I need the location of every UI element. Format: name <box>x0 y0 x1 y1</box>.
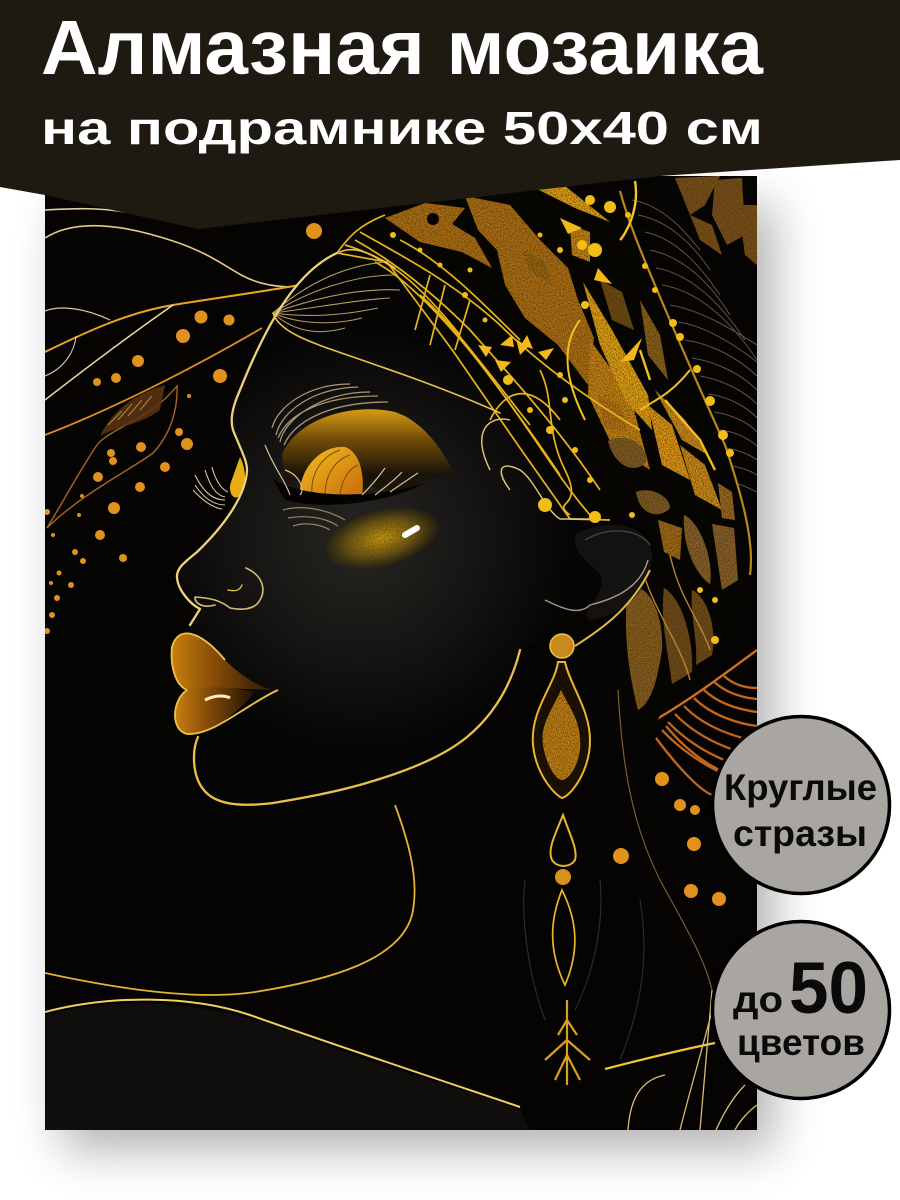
badge: up to 50 colours <box>712 922 890 1098</box>
badge: round rhinestones: Круглые <box>724 767 877 808</box>
upper right feather patches <box>675 176 757 265</box>
filigree band <box>337 181 751 680</box>
title line 2: на подрамнике 50х40 см <box>41 102 763 154</box>
background gold leaf lines <box>45 209 300 528</box>
painting: woman in gold headwrap <box>44 176 757 1130</box>
canvas shadow <box>62 205 774 1150</box>
headwrap yellow dots <box>390 195 734 644</box>
feathers behind headwrap <box>632 200 757 492</box>
badge: up to 50 colours: цветов <box>737 1022 865 1063</box>
forehead fan lines <box>273 262 400 332</box>
earring <box>533 634 590 1085</box>
badge: up to 50 colours: 50 <box>789 948 868 1029</box>
eye <box>193 384 452 530</box>
lips <box>172 633 278 734</box>
title line 1: Алмазная мозаика <box>41 5 764 91</box>
badge: up to 50 colours: до <box>733 979 783 1020</box>
badge: round rhinestones <box>712 716 890 894</box>
neck lines <box>45 690 757 1130</box>
ear <box>545 525 652 646</box>
gold leaf ornaments <box>478 218 642 372</box>
lower right orange feather <box>655 650 757 795</box>
header banner <box>0 0 900 229</box>
background gold dots <box>44 223 726 906</box>
face gold outline <box>177 250 520 805</box>
speckled gold patches <box>385 186 738 710</box>
badge: round rhinestones: стразы <box>733 813 867 854</box>
face <box>192 284 529 710</box>
neck and shoulder <box>45 1003 530 1130</box>
headwrap <box>333 181 751 730</box>
